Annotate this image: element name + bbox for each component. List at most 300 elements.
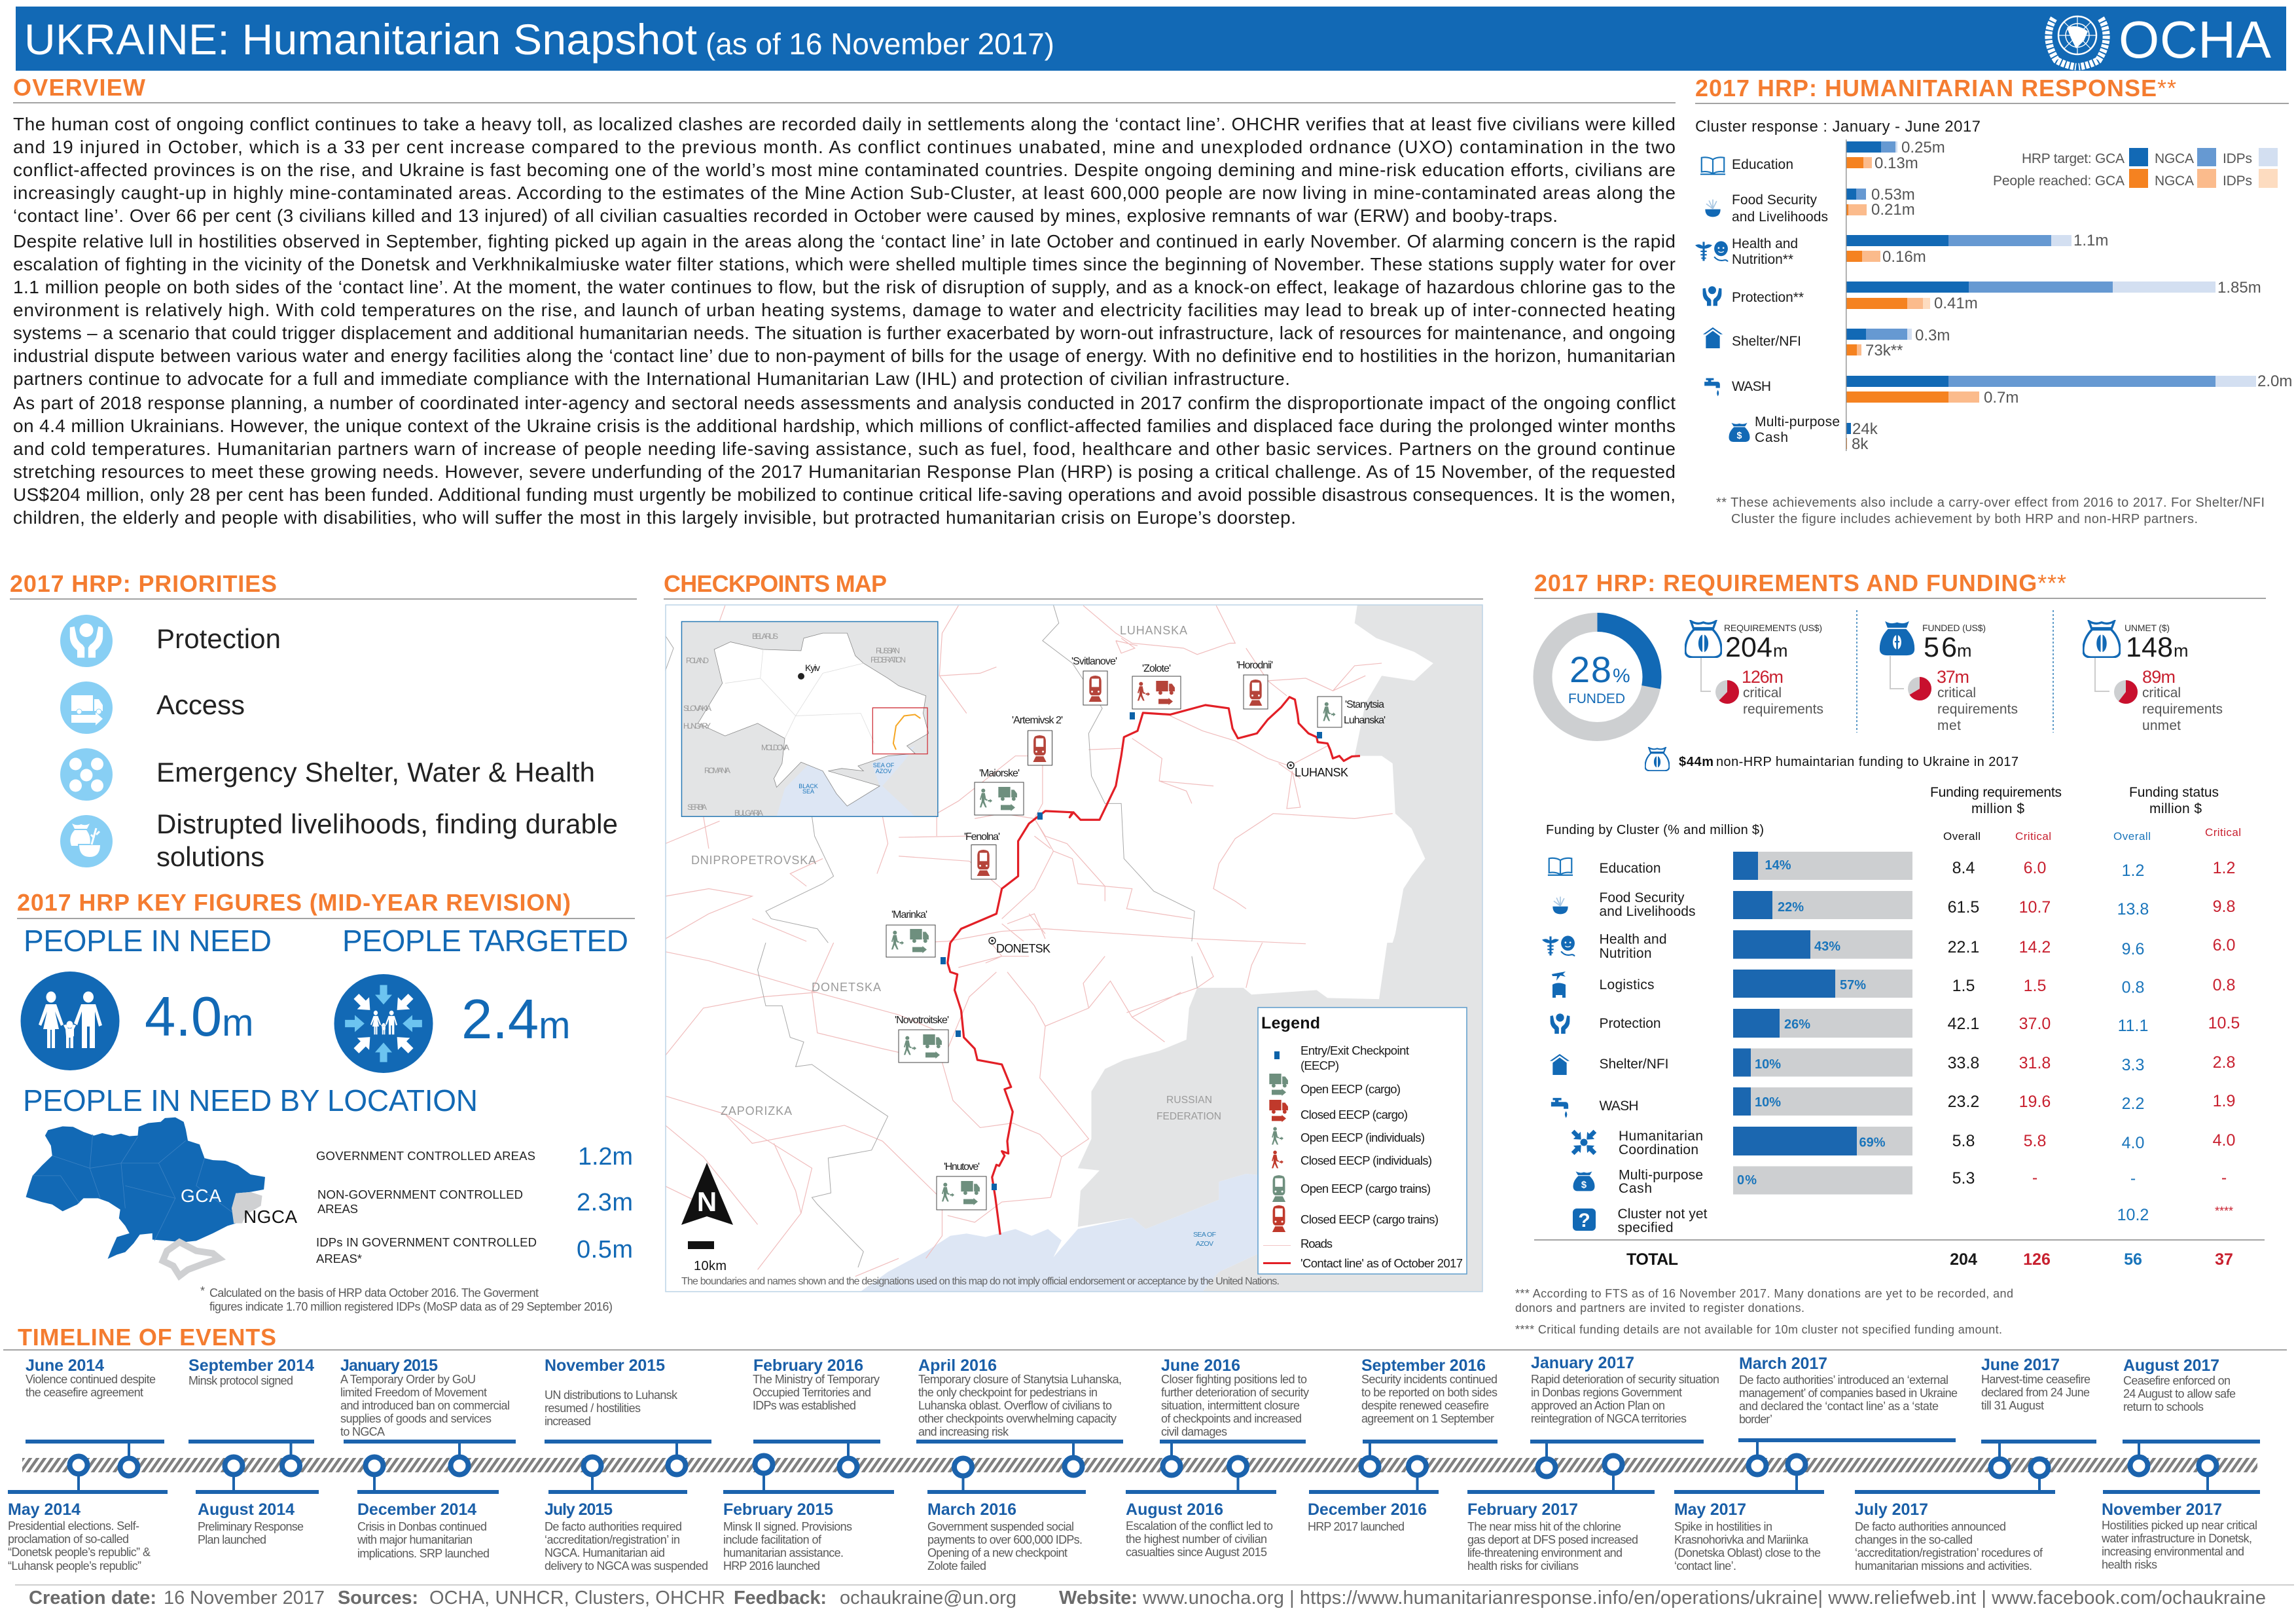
inset map: Ukraine location: SERBIA xyxy=(687,803,707,812)
table headers: Funding requirements xyxy=(1930,785,2062,800)
event: December 2016: HRP 2017 launched xyxy=(1308,1520,1405,1533)
panel: overview xyxy=(13,74,1676,528)
event: March 2016: payments to over 600,000 IDPs. xyxy=(927,1533,1083,1546)
footer xyxy=(15,1584,2294,1608)
funding table row: Multi-purpose Cash: 0% xyxy=(1737,1173,1757,1188)
checkpoint: Horodnii xyxy=(1236,660,1273,709)
event: February 2016: February 2016 xyxy=(753,1356,863,1375)
icon: access xyxy=(60,681,113,734)
event: January 2017 xyxy=(1531,1354,1719,1425)
text block: overview paragraph 2: escalation of fighting in the vicinity of the Donetsk and Verkhnikalmiuske water filter stations, which were shelled multiple times since the beginning of November. These stations supply water for over xyxy=(13,254,1676,274)
map frame xyxy=(666,605,1482,1292)
table headers: Funding by Cluster (% and million $) xyxy=(1546,823,1764,837)
stat: funded xyxy=(1880,621,2018,733)
footer: Sources: xyxy=(338,1588,418,1608)
funding table row: Health and Nutrition: Nutrition xyxy=(1600,946,1652,961)
bar chart: target and reached: 0.16m xyxy=(1882,248,1926,266)
funding table row: Education xyxy=(1548,852,2235,880)
event: August 2014: August 2014 xyxy=(198,1500,295,1519)
footer: ochaukraine@un.org xyxy=(840,1588,1016,1608)
stat: unmet: 89m xyxy=(2142,667,2176,687)
event: July 2017: changes in the so-called xyxy=(1855,1533,1973,1546)
checkpoint: Novotroitske xyxy=(895,1015,949,1063)
entry/exit checkpoint markers xyxy=(941,712,1322,1190)
stat: requirements: 126m xyxy=(1742,667,1784,687)
stat: funded: FUNDED (US$) xyxy=(1922,623,1986,633)
event: June 2016: of checkpoints and increased xyxy=(1161,1412,1302,1425)
checkpoint: Maiorske: 'Maiorske' xyxy=(979,768,1020,779)
funding table row: WASH: 1.9 xyxy=(2213,1092,2235,1110)
event: January 2017: January 2017 xyxy=(1531,1354,1634,1372)
funding table row: WASH: 19.6 xyxy=(2019,1093,2051,1111)
heading: people in need by location: PEOPLE IN NEED BY LOCATION xyxy=(23,1083,478,1117)
bar chart: target and reached: 0.3m xyxy=(1915,327,1950,344)
footnote: figures indicate 1.70 million registered IDPs (MoSP data as of 29 September 2016) xyxy=(209,1300,613,1313)
bar chart: target and reached: 24k xyxy=(1852,420,1878,438)
checkpoint: Stanytsia Luhanska: 'Stanytsia xyxy=(1345,699,1384,710)
footnote: Cluster the figure includes achievement by both HRP and non-HRP partners. xyxy=(1731,512,2198,526)
cluster labels with icons: Cash xyxy=(1755,430,1788,445)
footer: www.unocha.org | https://www.humanitarianresponse.info/en/operations/ukraine| www.reliefweb.int | www.facebook.com/ochaukraine xyxy=(1142,1588,2266,1608)
funding table row: Cluster not yet specified: Cluster not yet xyxy=(1618,1207,1708,1222)
event: August 2016 xyxy=(1126,1500,1273,1559)
map legend: Legend xyxy=(1261,1014,1320,1032)
event: August 2017 xyxy=(2123,1356,2236,1413)
event: June 2017: declared from 24 June xyxy=(1981,1386,2090,1399)
chart legend xyxy=(1993,148,2278,189)
location breakdown: GOVERNMENT CONTROLLED AREAS xyxy=(316,1149,535,1163)
non-HRP funding note: non-HRP humaintarian funding to Ukraine in 2017 xyxy=(1716,755,2018,769)
map legend xyxy=(1258,1008,1467,1274)
funding table row: Protection: Protection xyxy=(1600,1016,1661,1031)
stat: unmet: requirements xyxy=(2142,702,2223,717)
funding table row: Shelter/NFI: 33.8 xyxy=(1948,1054,1979,1072)
stat: unmet xyxy=(2083,621,2223,733)
event: September 2016: to be reported on both sides xyxy=(1361,1386,1498,1399)
funding table row: Shelter/NFI: 3.3 xyxy=(2122,1056,2144,1074)
event: February 2016 xyxy=(753,1356,880,1412)
map legend: Roads xyxy=(1300,1237,1333,1250)
event: August 2016: Escalation of the conflict led to xyxy=(1126,1519,1273,1533)
funding table row: WASH xyxy=(1551,1087,2235,1118)
footnote xyxy=(200,1284,613,1313)
funding table row: Humanitarian Coordination: Coordination xyxy=(1619,1142,1698,1157)
checkpoint: Zolote: 'Zolote' xyxy=(1142,663,1171,674)
title: UKRAINE: Humanitarian Snapshot xyxy=(24,15,697,64)
funding table row: WASH: 10% xyxy=(1755,1095,1781,1110)
bar chart: target and reached: 0.25m xyxy=(1901,139,1945,156)
funding table row: Food Security: and Livelihoods xyxy=(1600,904,1695,919)
event: February 2016: IDPs was established xyxy=(753,1399,856,1412)
bar chart: target and reached: 0.13m xyxy=(1874,154,1918,172)
funding table row: Health and Nutrition: 14.2 xyxy=(2019,938,2051,956)
text block: overview paragraph 3: As part of 2018 response planning, a number of coordinated inter-agency and sectoral needs assessments and analysis conducted in 2017 confirm the disproportionate impact of the ongoing conflict xyxy=(13,393,1676,413)
funding table totals: 37 xyxy=(2215,1250,2233,1269)
event: November 2017: November 2017 xyxy=(2102,1500,2222,1519)
funding table row: WASH: 23.2 xyxy=(1948,1093,1979,1111)
stat: funded: requirements xyxy=(1937,702,2018,717)
text block: overview paragraph 1 xyxy=(13,114,1676,226)
stat: funded: 37m xyxy=(1937,667,1969,687)
checkpoint: Stanytsia Luhanska: Luhanska' xyxy=(1344,715,1386,726)
location breakdown: 0.5m xyxy=(577,1236,633,1263)
event: June 2016: June 2016 xyxy=(1161,1356,1240,1375)
cluster labels with icons: Food Security xyxy=(1732,192,1817,208)
inset map: Ukraine location: BELARUS xyxy=(752,632,778,641)
event: January 2017: Rapid deterioration of security situation xyxy=(1531,1373,1719,1386)
event: June 2016: situation, intermittent closure xyxy=(1161,1399,1300,1412)
funding table row: Humanitarian Coordination: Humanitarian xyxy=(1619,1129,1703,1144)
priority text: livelihoods: solutions xyxy=(156,841,264,872)
event: August 2017: Ceasefire enforced on xyxy=(2123,1374,2231,1387)
event: January 2017: reintegration of NGCA territories xyxy=(1531,1412,1687,1425)
map legend: (EECP) xyxy=(1300,1059,1339,1072)
checkpoint: Stanytsia Luhanska xyxy=(1318,697,1386,727)
checkpoint: Hnutove: 'Hnutove' xyxy=(944,1161,980,1172)
chart legend: IDPs xyxy=(2223,173,2252,189)
checkpoint: Fenolna: 'Fenolna' xyxy=(964,831,1000,843)
bar chart: target and reached: 0.21m xyxy=(1871,201,1915,219)
footnote xyxy=(1716,496,2265,526)
stat: requirements: 204 xyxy=(1725,632,1772,663)
funding table row: Logistics: 57% xyxy=(1840,978,1866,992)
stat: unmet: 148 xyxy=(2126,632,2173,663)
funding table totals: 56 xyxy=(2124,1250,2142,1269)
event: November 2015 xyxy=(545,1356,678,1428)
event: May 2017: (Donetska Oblast) close to the xyxy=(1674,1546,1821,1559)
map labels: DONETSKA xyxy=(812,981,881,994)
event: March 2016: Government suspended social xyxy=(927,1520,1074,1533)
text block: overview paragraph 1: The human cost of ongoing conflict continues to take a heavy toll, as localized clashes are recorded daily in settlements along the ‘contact line’. OHCHR verifies that at least five civilians were killed xyxy=(13,114,1676,134)
event: December 2016: December 2016 xyxy=(1308,1500,1427,1519)
map labels: RUSSIAN xyxy=(1166,1095,1212,1106)
text block: overview paragraph 2 xyxy=(13,231,1676,389)
event: June 2016: civil damages xyxy=(1161,1425,1227,1438)
funding table row: Logistics: 0.8 xyxy=(2213,976,2235,994)
funding table row: Shelter/NFI xyxy=(1550,1049,2235,1076)
event: February 2017: gas deport at DFS posed increased xyxy=(1467,1533,1638,1546)
non-HRP funding note: $44m xyxy=(1679,755,1713,769)
table headers: Overall xyxy=(2113,830,2151,843)
funding table row: Shelter/NFI: 2.8 xyxy=(2213,1053,2235,1072)
funding table row: Food Security: 61.5 xyxy=(1948,898,1979,917)
event: December 2014: Crisis in Donbas continued xyxy=(357,1520,487,1533)
event: September 2016: September 2016 xyxy=(1361,1356,1486,1375)
heading: humanitarian response: 2017 HRP: HUMANITARIAN RESPONSE** xyxy=(1695,75,2176,101)
event: December 2014 xyxy=(357,1500,490,1560)
event: April 2016: and increasing risk xyxy=(918,1425,1009,1438)
location breakdown xyxy=(316,1143,633,1265)
chart legend: People reached: GCA xyxy=(1993,173,2125,189)
bar chart: target and reached: 1.85m xyxy=(2217,279,2261,297)
text block: overview paragraph 3 xyxy=(13,393,1676,528)
map labels: SEA OF xyxy=(1193,1231,1216,1239)
funding table row: Multi-purpose Cash: - xyxy=(2130,1169,2136,1188)
funding table row: Food Security: 10.7 xyxy=(2019,898,2051,917)
cluster labels with icons: Protection** xyxy=(1732,290,1804,305)
funding table row: Logistics: 0.8 xyxy=(2122,978,2144,996)
stat: unmet: critical xyxy=(2142,685,2181,700)
event: November 2017: Hostilities picked up near critical xyxy=(2102,1519,2257,1532)
figure: 4.0m: 4.0m xyxy=(145,986,254,1048)
title date: (as of 16 November 2017) xyxy=(706,27,1054,61)
funding table row: Health and Nutrition: 22.1 xyxy=(1948,938,1979,956)
location breakdown: AREAS* xyxy=(316,1252,362,1265)
footnotes: **** Critical funding details are not available for 10m cluster not specified funding amount. xyxy=(1515,1323,2002,1336)
event: May 2017: Krasnohorivka and Mariinka xyxy=(1674,1533,1809,1546)
event: September 2016: Security incidents continued xyxy=(1361,1373,1498,1386)
chart: 28% funded donut xyxy=(1543,622,1652,732)
event: April 2016: April 2016 xyxy=(918,1356,997,1375)
text block: overview paragraph 2: industrial dispute between various water and energy facilities along the ‘contact line’ due to non-payment of bills for the usage of energy. With no definitive end to hostilities in the horizon, humanitarian xyxy=(13,346,1676,366)
event: May 2014: “Luhansk people’s republic” xyxy=(8,1559,141,1572)
event: November 2015: UN distributions to Luhansk xyxy=(545,1389,678,1402)
chart subtitle: Cluster response : January - June 2017 xyxy=(1695,118,1981,136)
funding table row: Food Security: 9.8 xyxy=(2213,898,2235,916)
funding table row: Multi-purpose Cash: - xyxy=(2221,1169,2227,1187)
inset map: Ukraine location: SEA OF xyxy=(873,762,895,769)
chart legend: IDPs xyxy=(2223,151,2252,166)
icon: north arrow: N xyxy=(697,1186,717,1217)
event: January 2015: to NGCA xyxy=(340,1425,385,1438)
event: July 2015: July 2015 xyxy=(545,1500,613,1519)
panel: humanitarian response xyxy=(1695,75,2292,526)
event: June 2017 xyxy=(1981,1356,2090,1412)
funding table row: Protection: 37.0 xyxy=(2019,1015,2051,1033)
event: February 2015: Minsk II signed. Provisions xyxy=(723,1520,852,1533)
stat: requirements: critical xyxy=(1743,685,1782,700)
map disclaimer: The boundaries and names shown and the designations used on this map do not imply official endorsement or acceptance by the United Nations. xyxy=(681,1276,1280,1287)
map legend: Closed EECP (cargo trains) xyxy=(1300,1212,1439,1226)
event: March 2017: border’ xyxy=(1739,1413,1772,1426)
funding table row: WASH: 2.2 xyxy=(2122,1095,2144,1113)
chart legend: NGCA xyxy=(2155,173,2194,189)
event: February 2017: health risks for civilians xyxy=(1467,1559,1579,1572)
text block: overview paragraph 1: conflict-affected provinces is on the rise, and Ukraine is fast becoming one of the world’s most mine contaminated countries. Despite ongoing demining and mine-risk education efforts, civilians are xyxy=(13,160,1676,180)
event: August 2017: August 2017 xyxy=(2123,1356,2219,1375)
map: Ukraine GCA and NGCA: GCA xyxy=(181,1186,221,1206)
funding table row: Cluster not yet specified: **** xyxy=(2215,1205,2233,1218)
event: March 2017: management’ of companies based in Ukraine xyxy=(1739,1387,1958,1400)
event: July 2015: ‘accreditation/registration’ in xyxy=(545,1533,680,1546)
timeline rings xyxy=(69,1456,2216,1477)
inset map: Ukraine location: BULGARIA xyxy=(734,808,763,818)
timeline bottom bars xyxy=(8,1490,2260,1494)
event: July 2017: De facto authorities announced xyxy=(1855,1520,2006,1533)
event: January 2015: limited Freedom of Movement xyxy=(340,1386,487,1399)
inset map: Ukraine location: AZOV xyxy=(876,768,891,774)
map legend: Closed EECP (individuals) xyxy=(1300,1154,1432,1167)
cluster labels with icons: and Livelihoods xyxy=(1732,209,1828,225)
cluster labels with icons: Education xyxy=(1732,157,1793,172)
map legend: Entry/Exit Checkpoint xyxy=(1300,1044,1409,1057)
cluster labels with icons: WASH xyxy=(1732,379,1771,394)
panel: requirements and funding xyxy=(1515,570,2266,1336)
event: August 2016: the highest number of civilian xyxy=(1126,1533,1267,1546)
event: December 2014: implications. SRP launched xyxy=(357,1547,490,1560)
icon: protection xyxy=(60,615,113,667)
event: January 2015: A Temporary Order by GoU xyxy=(340,1373,476,1386)
non-HRP funding note xyxy=(1645,748,2018,771)
funding table row: Cluster not yet specified xyxy=(1573,1205,2233,1235)
funding table row: Cluster not yet specified: 10.2 xyxy=(2117,1206,2149,1224)
funding table row: Multi-purpose Cash xyxy=(1573,1167,2227,1196)
funding table row: Education: 8.4 xyxy=(1952,859,1975,877)
table headers: Critical xyxy=(2205,826,2241,839)
icon: UN emblem xyxy=(2049,16,2106,67)
inset map: Ukraine location: MOLDOVA xyxy=(761,743,789,752)
contact line xyxy=(948,697,1360,1235)
text block: overview paragraph 2: partners continue to advocate for a full and immediate compliance with the International Humanitarian Law (IHL) and protection of civilian infrastructure. xyxy=(13,369,1290,389)
funding table row: Protection: 26% xyxy=(1784,1017,1810,1032)
checkpoint: Marinka xyxy=(886,909,935,957)
funding table row: Shelter/NFI: 10% xyxy=(1755,1057,1781,1072)
heading: timeline: TIMELINE OF EVENTS xyxy=(18,1324,276,1351)
text block: overview paragraph 3: and cold temperatures. Humanitarian partners warn of increase of people needing life-saving assistance, such as fuel, food, healthcare and other basic services. Partners on the ground continue xyxy=(13,439,1676,459)
event: January 2017: in Donbas regions Government xyxy=(1531,1386,1682,1399)
text block: overview paragraph 2: environment is relatively high. With cold temperatures on the rise, and launch of urban heating systems, damage to water and electricity facilities may lead to break up of inter-connected heating xyxy=(13,300,1676,320)
event: February 2015: include facilitation of xyxy=(723,1533,822,1546)
event: February 2016: The Ministry of Temporary xyxy=(753,1373,880,1386)
checkpoint: Marinka: 'Marinka' xyxy=(891,909,927,920)
footer: Creation date: xyxy=(29,1588,156,1608)
event: June 2014: June 2014 xyxy=(26,1356,104,1375)
event: June 2016: Closer fighting positions led to xyxy=(1161,1373,1307,1386)
cluster labels with icons: Shelter/NFI xyxy=(1732,334,1801,349)
funding table row: Multi-purpose Cash: Cash xyxy=(1619,1181,1652,1196)
checkpoint: Hnutove xyxy=(937,1161,986,1210)
event: September 2016: agreement on 1 September xyxy=(1361,1412,1494,1425)
footnotes: donors and partners are invited to register donations. xyxy=(1515,1301,1804,1315)
event: August 2014: Plan launched xyxy=(198,1533,266,1546)
funding table totals: TOTAL xyxy=(1626,1250,1678,1269)
funding table row: Logistics: 1.5 xyxy=(2024,977,2046,995)
priority text: livelihoods: Distrupted livelihoods, finding durable xyxy=(156,808,618,839)
title banner xyxy=(16,7,2286,71)
funding table row: Protection xyxy=(1551,1009,2240,1038)
map labels: DONETSK xyxy=(996,942,1050,955)
checkpoint: Zolote xyxy=(1132,663,1181,709)
event: November 2017: health risks xyxy=(2102,1558,2157,1571)
event: May 2017: ‘contact line’. xyxy=(1674,1559,1736,1572)
event: July 2015: De facto authorities required xyxy=(545,1520,682,1533)
funding table row: Education: 14% xyxy=(1765,858,1791,873)
chart legend: NGCA xyxy=(2155,151,2194,166)
footer: Website: xyxy=(1059,1588,1138,1608)
funding table row: Education: Education xyxy=(1600,861,1661,876)
map labels: DNIPROPETROVSKA xyxy=(691,854,816,867)
stat: unmet: m xyxy=(2174,641,2189,661)
text block: overview paragraph 1: ‘contact line’. Over 66 per cent (3 civilians killed and 13 injured) of all civilian casualties recorded in October were caused by mines, explosive remnants of war (ERW) and booby-traps. xyxy=(13,206,1558,226)
event: April 2016: Luhanska oblast. Overflow of civilians to xyxy=(918,1399,1112,1412)
funding table row: Logistics: Logistics xyxy=(1600,977,1655,992)
event: September 2016: despite renewed ceasefire xyxy=(1361,1399,1489,1412)
table headers: Critical xyxy=(2015,830,2051,843)
funding table row: Humanitarian Coordination: 4.0 xyxy=(2122,1134,2144,1152)
funding table row: Logistics: 1.5 xyxy=(1952,977,1975,995)
event: November 2017 xyxy=(2101,1500,2257,1571)
table headers: million $ xyxy=(2149,801,2202,816)
scale bar xyxy=(688,1241,726,1273)
panel: timeline of events xyxy=(3,1324,2287,1572)
inset map: Ukraine location: SLOVAKIA xyxy=(683,704,711,713)
event: February 2017: The near miss hit of the chlorine xyxy=(1467,1520,1621,1533)
panel: checkpoints map xyxy=(664,570,1483,1292)
footnote: ** These achievements also include a carry-over effect from 2016 to 2017. For Shelter/NFI xyxy=(1716,496,2265,510)
icon: emergency xyxy=(60,748,113,801)
event: August 2016: August 2016 xyxy=(1126,1500,1223,1519)
funding table row: Health and Nutrition: Health and xyxy=(1600,932,1666,947)
event: February 2017: life-threatening environment and xyxy=(1467,1546,1623,1559)
event: February 2015 xyxy=(723,1500,852,1572)
event: November 2015: November 2015 xyxy=(545,1356,665,1375)
priority text: access: Access xyxy=(156,689,245,720)
funding table row: Food Security xyxy=(1552,890,2235,919)
funding table row: Cluster not yet specified: specified xyxy=(1618,1220,1673,1235)
chart: 28% funded donut: 28 xyxy=(1570,649,1611,690)
footnote: Calculated on the basis of HRP data October 2016. The Goverment xyxy=(209,1286,539,1299)
event: December 2014: December 2014 xyxy=(357,1500,476,1519)
map legend: Closed EECP (cargo) xyxy=(1300,1108,1408,1121)
checkpoint: Artemivsk 2: 'Artemivsk 2' xyxy=(1012,715,1063,726)
icon: livelihoods xyxy=(60,815,113,867)
funding table row: Protection: 11.1 xyxy=(2118,1017,2148,1035)
event: May 2014: Presidential elections. Self- xyxy=(8,1519,139,1533)
funding table totals: 204 xyxy=(1950,1250,1977,1269)
heading: priorities: 2017 HRP: PRIORITIES xyxy=(10,570,277,597)
cluster labels with icons: Multi-purpose xyxy=(1755,414,1840,429)
event: June 2014 xyxy=(26,1356,156,1399)
funding table row: Health and Nutrition: 9.6 xyxy=(2122,940,2144,958)
event: January 2015 xyxy=(340,1356,510,1438)
footnote: * xyxy=(200,1284,205,1298)
map legend: 'Contact line' as of October 2017 xyxy=(1300,1256,1463,1270)
inset map: Ukraine location: Kyiv xyxy=(805,663,820,673)
heading: overview: OVERVIEW xyxy=(13,74,145,101)
funding table row: Food Security: 22% xyxy=(1778,900,1804,915)
event: January 2015: supplies of goods and services xyxy=(340,1412,492,1425)
location breakdown: 1.2m xyxy=(578,1143,633,1171)
stat: unmet: unmet xyxy=(2142,718,2181,733)
map labels: LUHANSKA xyxy=(1120,624,1187,637)
figure: 2.4m: 2.4m xyxy=(461,989,571,1051)
event: August 2016: casualties since August 2015 xyxy=(1126,1546,1267,1559)
stat: requirements: m xyxy=(1773,641,1788,661)
funding table totals xyxy=(1626,1250,2233,1269)
event: June 2017: June 2017 xyxy=(1981,1356,2060,1374)
event: April 2016 xyxy=(918,1356,1122,1438)
event: April 2016: the only checkpoint for pedestrians in xyxy=(918,1386,1098,1399)
scale bar: 10km xyxy=(694,1259,726,1273)
event: August 2014 xyxy=(198,1500,304,1546)
funding table row: Multi-purpose Cash: Multi-purpose xyxy=(1619,1168,1703,1182)
inset map: Ukraine location: ROMANIA xyxy=(704,766,730,775)
map legend: Open EECP (cargo trains) xyxy=(1300,1182,1431,1195)
event: June 2014: Violence continued despite xyxy=(26,1373,156,1386)
inset map: Ukraine location: BLACK xyxy=(798,783,818,790)
funding table row: Protection: 10.5 xyxy=(2208,1014,2240,1032)
timeline top bars xyxy=(26,1438,2260,1444)
figure label: people targeted: PEOPLE TARGETED xyxy=(342,924,628,958)
table headers xyxy=(1546,785,2241,843)
table headers: million $ xyxy=(1971,801,2024,816)
event: September 2016 xyxy=(1361,1356,1498,1425)
event: February 2017: February 2017 xyxy=(1467,1500,1578,1519)
inset map: Ukraine location: FEDERATION xyxy=(870,655,906,664)
text block: overview paragraph 2: systems – a scenario that could trigger displacement and additional humanitarian needs. The situation is further exacerbated by worn-out infrastructure, lack of resources for maintenance, and ongoing xyxy=(13,323,1676,343)
bar chart: target and reached: 8k xyxy=(1852,435,1869,453)
funding table row: Health and Nutrition: 43% xyxy=(1814,939,1840,954)
